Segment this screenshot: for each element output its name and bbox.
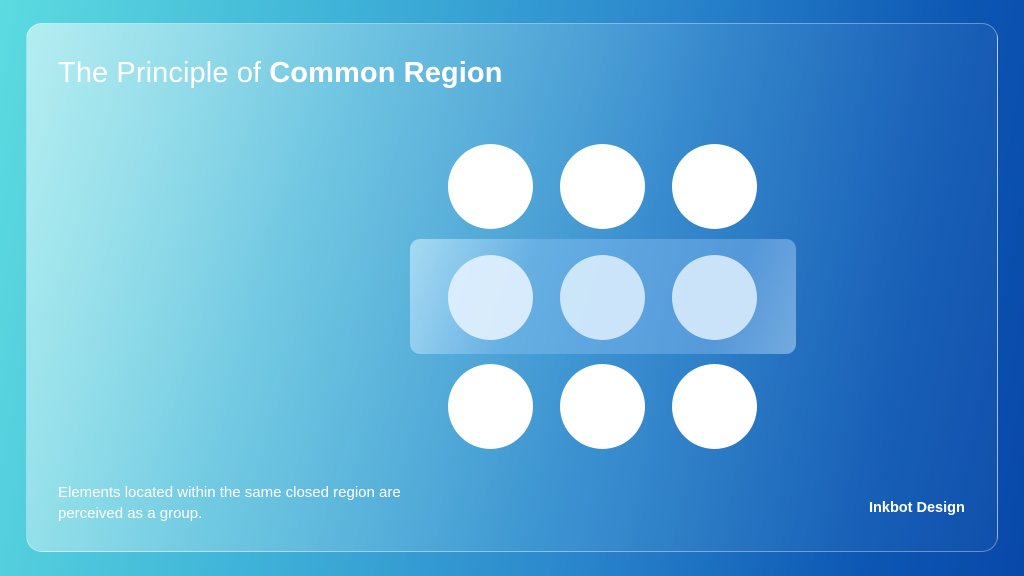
title: The Principle of Common Region bbox=[58, 57, 503, 89]
common region with grouped circles bbox=[410, 239, 796, 354]
circles: top row bbox=[448, 144, 757, 229]
brand: Inkbot Design bbox=[869, 500, 965, 516]
description text: Elements located within the same closed region are perceived as a group. bbox=[58, 484, 401, 522]
circles: bottom row bbox=[448, 364, 757, 449]
